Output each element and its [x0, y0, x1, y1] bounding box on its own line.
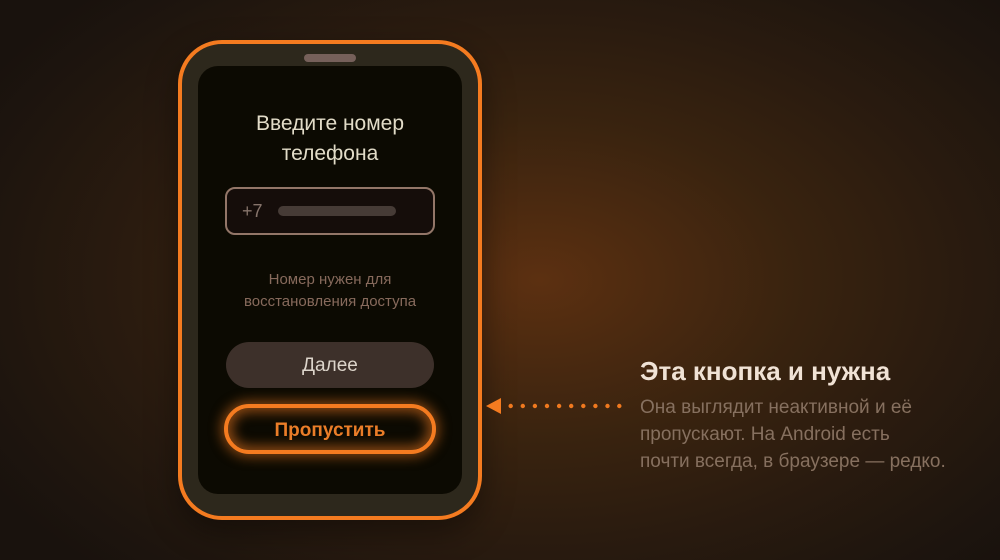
- phone input field: [225, 187, 435, 235]
- number placeholder: [278, 206, 396, 216]
- screen title: Введите номер: [256, 112, 404, 135]
- next button: Далее: [302, 355, 358, 376]
- helper text: [244, 271, 416, 310]
- phone: [178, 40, 482, 520]
- callout text: [640, 397, 946, 472]
- callout text: почти всегда, в браузере — редко.: [640, 451, 946, 472]
- callout text: пропускают. На Android есть: [640, 424, 890, 445]
- helper text: Номер нужен для: [269, 271, 391, 288]
- arrow: [486, 398, 622, 414]
- country code: +7: [242, 201, 263, 221]
- skip button: Пропустить: [274, 420, 385, 441]
- next button: [226, 342, 434, 388]
- screen title: [256, 112, 404, 165]
- phone screen: [198, 66, 462, 494]
- screen title: телефона: [282, 142, 378, 165]
- callout heading: Эта кнопка и нужна: [640, 356, 890, 386]
- phone speaker: [304, 54, 356, 62]
- callout text: Она выглядит неактивной и её: [640, 397, 912, 418]
- skip button: [224, 404, 436, 454]
- helper text: восстановления доступа: [244, 293, 416, 310]
